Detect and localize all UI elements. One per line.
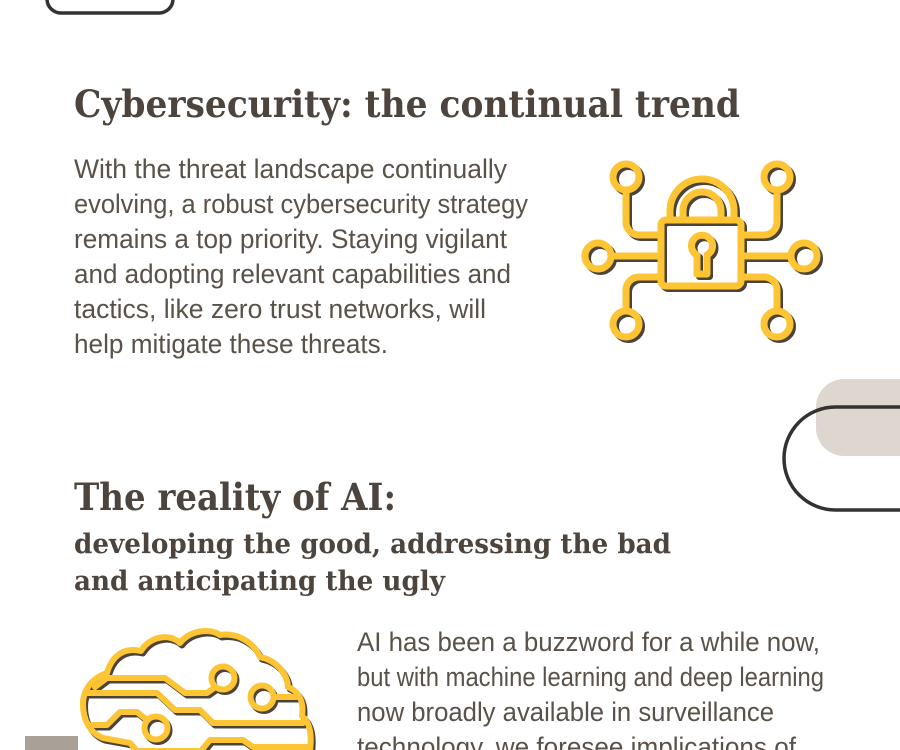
- text block: cybersecurity body: [74, 154, 529, 359]
- text block: AI body: [357, 627, 824, 750]
- decorative outlined pill: [784, 407, 900, 510]
- text block: AI body: but with machine learning and deep learning: [357, 662, 824, 692]
- text block: AI body: now broadly available in surveillance: [357, 697, 774, 727]
- icon: circuit padlock: [585, 164, 820, 340]
- text block: cybersecurity body: tactics, like zero trust networks, will: [74, 294, 486, 324]
- heading: cybersecurity: Cybersecurity: the continual trend: [74, 82, 740, 126]
- subheading: AI: developing the good, addressing the bad: [74, 529, 671, 560]
- icon: circuit brain: [83, 631, 313, 750]
- top outlined pill: [47, 0, 173, 13]
- text block: cybersecurity body: help mitigate these threats.: [74, 329, 388, 359]
- decorative beige pill: [816, 379, 900, 456]
- subheading: AI: and anticipating the ugly: [74, 566, 446, 597]
- grey square: [25, 736, 78, 750]
- subheading: AI: [74, 529, 671, 597]
- text block: AI body: AI has been a buzzword for a while now,: [357, 627, 820, 657]
- heading: the reality of AI: The reality of AI:: [74, 475, 396, 519]
- text block: cybersecurity body: With the threat landscape continually: [74, 154, 508, 184]
- text block: cybersecurity body: and adopting relevant capabilities and: [74, 259, 511, 289]
- text block: cybersecurity body: evolving, a robust cybersecurity strategy: [74, 189, 529, 219]
- text block: cybersecurity body: remains a top priority. Staying vigilant: [74, 224, 508, 254]
